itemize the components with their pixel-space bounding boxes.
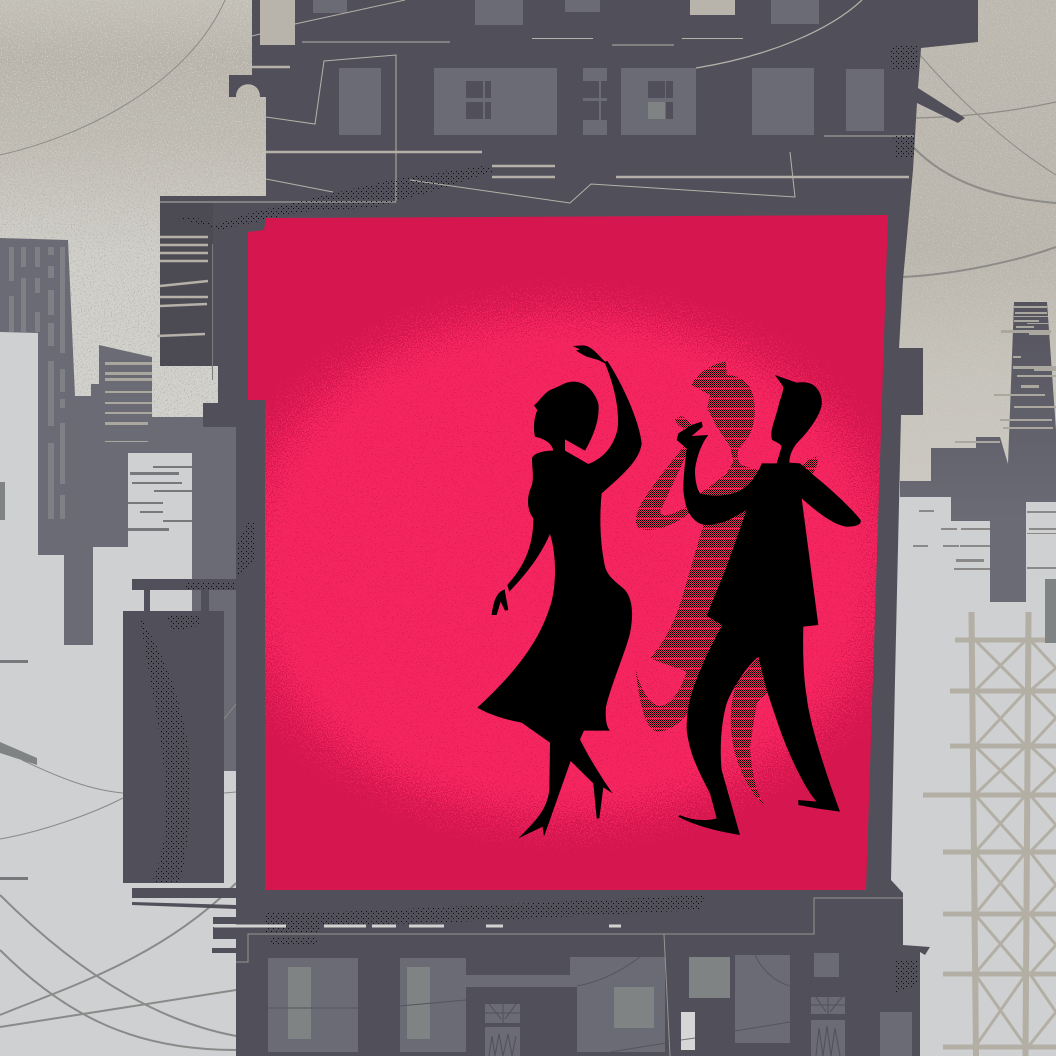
- window block: [434, 68, 557, 135]
- tower ledge lines: [955, 306, 1056, 443]
- lower facade lines: [214, 898, 903, 1056]
- lower facade details: [268, 953, 912, 1056]
- upper-left billboard with lines: [157, 203, 213, 380]
- left tower and mid-grey buildings: [0, 238, 236, 771]
- dancers: [477, 345, 861, 838]
- upper facade lines: [160, 0, 914, 203]
- man silhouette: [677, 375, 861, 835]
- upper facade details: [260, 0, 884, 135]
- window block right: [621, 68, 696, 135]
- red panel with spotlight glow: [240, 210, 900, 900]
- ground wires left: [0, 704, 236, 1050]
- light building left: [0, 332, 236, 1056]
- scaffold: [923, 612, 1056, 1056]
- light building lines: [913, 510, 1056, 570]
- stipple texture on the frame: [178, 44, 918, 993]
- diagonal grey strut left: [0, 742, 37, 765]
- sky wires: [0, 0, 1056, 277]
- hanging billboard left: [123, 590, 224, 883]
- second tower window lines: [105, 362, 152, 442]
- shadow partner hatched: [636, 362, 817, 807]
- woman silhouette: [477, 345, 642, 838]
- right buildings: [890, 302, 1056, 1056]
- tower windows: [9, 247, 65, 519]
